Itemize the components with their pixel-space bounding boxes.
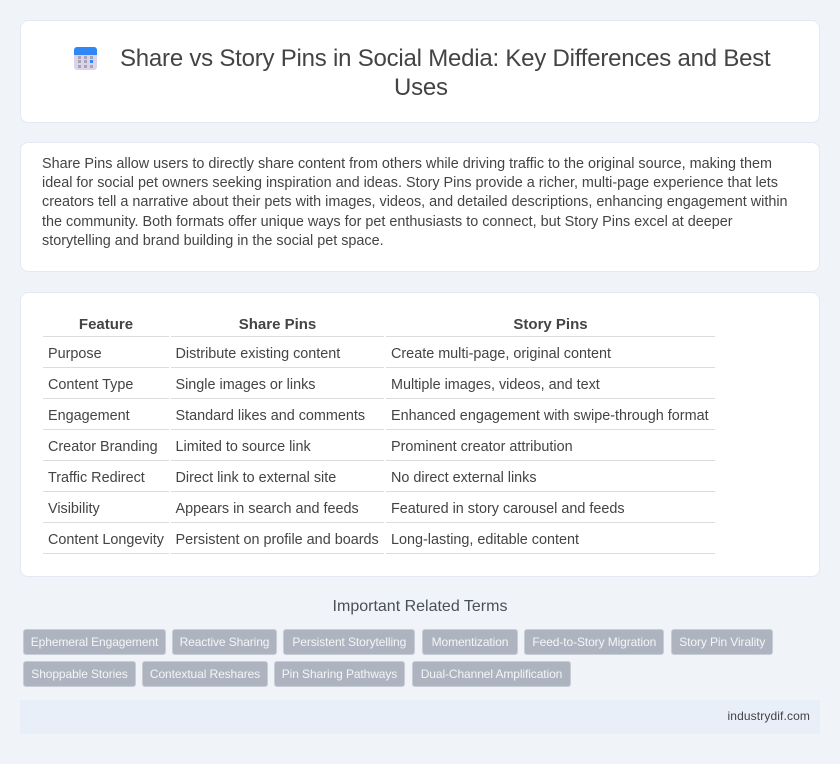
related term tags: Persistent Storytelling xyxy=(292,635,406,649)
comparison table: Limited to source link xyxy=(176,439,311,455)
comparison table: Traffic Redirect xyxy=(48,470,145,486)
intro paragraph: ideal for social pet owners seeking inspiration and ideas. Story Pins provide a richer, multi-page experience that lets xyxy=(42,175,778,191)
comparison table: Multiple images, videos, and text xyxy=(391,377,600,393)
related term tags xyxy=(23,629,773,687)
table header: Story Pins xyxy=(513,316,588,333)
comparison table: Distribute existing content xyxy=(176,346,340,362)
comparison table: Standard likes and comments xyxy=(176,408,365,424)
table header: Share Pins xyxy=(239,316,316,333)
comparison table: Purpose xyxy=(48,346,102,362)
title xyxy=(120,45,770,101)
comparison table: Prominent creator attribution xyxy=(391,439,573,455)
comparison table xyxy=(43,316,715,554)
table header xyxy=(79,316,588,333)
related term tags: Story Pin Virality xyxy=(679,635,765,649)
related terms heading: Important Related Terms xyxy=(333,598,507,615)
table header: Feature xyxy=(79,316,133,333)
comparison table: Content Longevity xyxy=(48,532,164,548)
comparison table: Enhanced engagement with swipe-through format xyxy=(391,408,709,424)
related term tags: Momentization xyxy=(432,635,508,649)
intro paragraph xyxy=(42,156,788,249)
related term tags: Pin Sharing Pathways xyxy=(282,667,397,681)
footer bar xyxy=(20,700,820,734)
title: Share vs Story Pins in Social Media: Key Differences and Best xyxy=(120,45,770,72)
related term tags: Dual-Channel Amplification xyxy=(421,667,562,681)
footer source: industrydif.com xyxy=(728,709,810,723)
comparison table: Appears in search and feeds xyxy=(176,501,359,517)
intro text panel xyxy=(20,142,820,272)
comparison table: Long-lasting, editable content xyxy=(391,532,579,548)
intro paragraph: storytelling and brand building in the social pet space. xyxy=(42,233,384,249)
comparison table: Featured in story carousel and feeds xyxy=(391,501,625,517)
related term tags: Shoppable Stories xyxy=(31,667,128,681)
comparison table: No direct external links xyxy=(391,470,537,486)
comparison table: Persistent on profile and boards xyxy=(176,532,379,548)
comparison table: Content Type xyxy=(48,377,133,393)
comparison table: Single images or links xyxy=(176,377,315,393)
related term tags: Contextual Reshares xyxy=(150,667,260,681)
title: Uses xyxy=(394,74,448,101)
related term tags: Ephemeral Engagement xyxy=(31,635,158,649)
intro paragraph: Share Pins allow users to directly share content from others while driving traffic to the original source, making them xyxy=(42,156,772,172)
related term tags: Feed-to-Story Migration xyxy=(532,635,656,649)
comparison table panel xyxy=(20,292,820,577)
icon: calendar xyxy=(74,47,97,70)
comparison table: Visibility xyxy=(48,501,100,517)
comparison table: Create multi-page, original content xyxy=(391,346,611,362)
comparison table: Creator Branding xyxy=(48,439,158,455)
header panel xyxy=(20,20,820,123)
intro paragraph: creators tell a narrative about their pets with images, videos, and detailed descriptions, enhancing engagement within xyxy=(42,194,788,210)
related term tags: Reactive Sharing xyxy=(180,635,269,649)
comparison table: Direct link to external site xyxy=(176,470,336,486)
comparison table: Engagement xyxy=(48,408,130,424)
intro paragraph: the community. Both formats offer unique ways for pet enthusiasts to connect, but Story Pins excel at deeper xyxy=(42,214,733,230)
